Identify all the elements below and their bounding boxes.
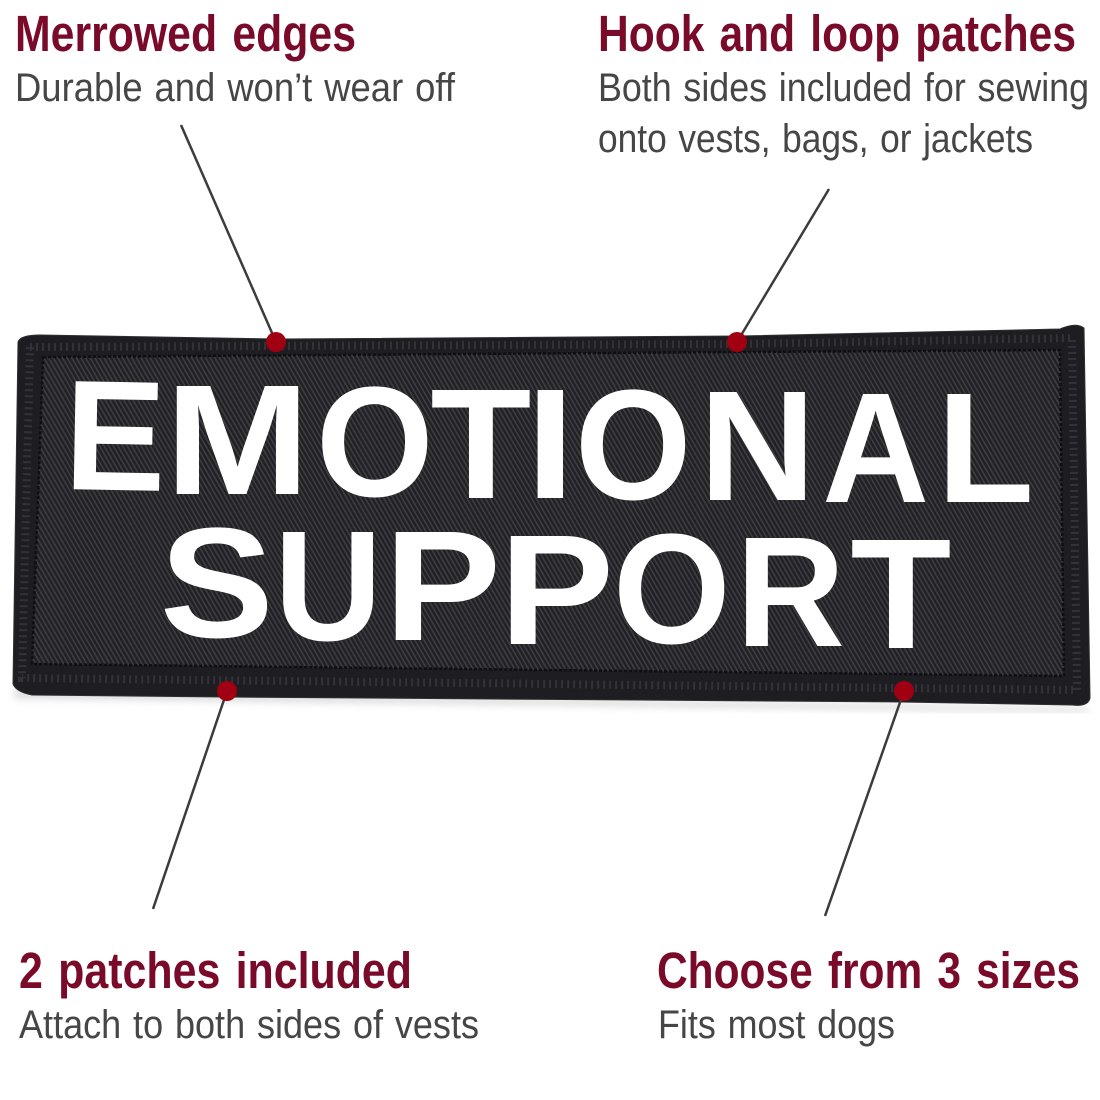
callout: 2 patches included: Attach to both sides of vests — [19, 1003, 479, 1047]
patch lettering — [63, 348, 1034, 682]
patch lettering: T — [430, 357, 531, 532]
callout: hook and loop patches: onto vests, bags, or jackets — [598, 117, 1033, 161]
pointer: sizes — [825, 681, 914, 916]
callout: choose from 3 sizes: Fits most dogs — [658, 1003, 895, 1047]
patch lettering: P — [499, 503, 614, 678]
callout: 2 patches included — [19, 942, 479, 1047]
patch lettering: M — [165, 353, 310, 528]
patch lettering: P — [384, 499, 501, 674]
patch lettering: O — [316, 355, 434, 530]
pointer: hook and loop — [727, 189, 829, 352]
callout: merrowed edges — [15, 5, 456, 110]
pointer: merrowed edges — [181, 125, 286, 352]
callout: 2 patches included: 2 patches included — [19, 942, 412, 999]
callout: choose from 3 sizes — [657, 942, 1080, 1047]
patch lettering: O — [613, 502, 731, 677]
pointer: 2 patches — [153, 681, 237, 909]
patch lettering: L — [937, 361, 1034, 536]
patch: emotional support — [13, 325, 1090, 712]
patch lettering: E — [63, 348, 167, 525]
callout: merrowed edges: Durable and won’t wear off — [15, 66, 456, 110]
patch lettering: A — [822, 361, 929, 536]
patch lettering: N — [699, 359, 816, 534]
patch lettering: T — [850, 507, 951, 682]
patch lettering: I — [526, 357, 575, 532]
patch lettering: R — [736, 505, 845, 680]
patch lettering: S — [160, 496, 274, 671]
callout: merrowed edges: Merrowed edges — [15, 5, 356, 62]
patch lettering: U — [274, 499, 382, 674]
callout: hook and loop patches — [598, 5, 1089, 161]
patch lettering: O — [575, 358, 691, 533]
